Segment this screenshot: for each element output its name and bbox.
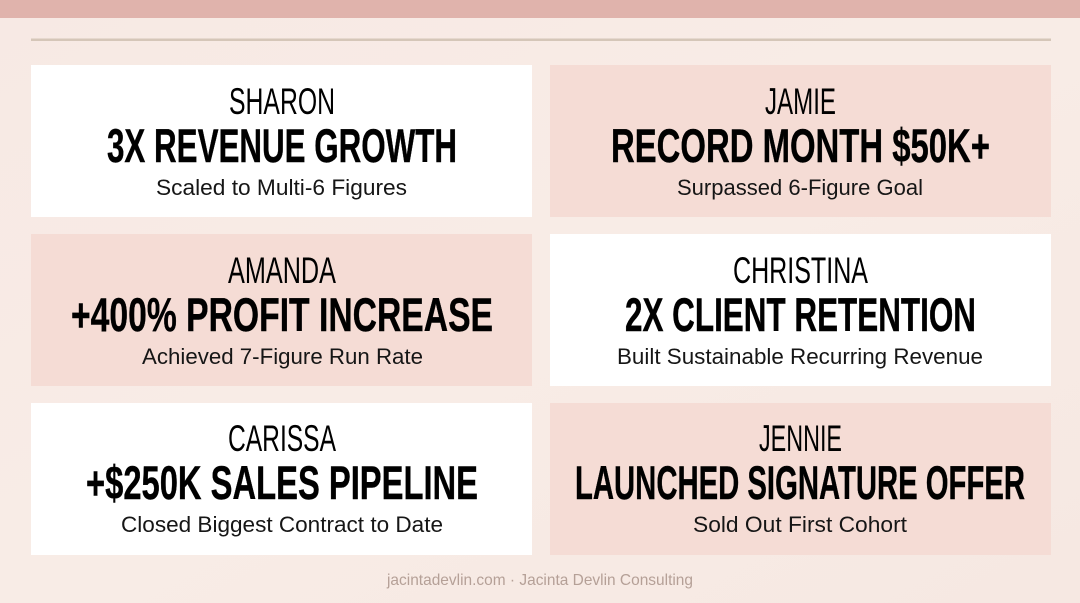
supporting text: Scaled to Multi-6 Figures: [156, 175, 407, 200]
panel: Jamie: [550, 65, 1051, 217]
footer credit: jacintadevlin.com · Jacinta Devlin Consulting: [386, 572, 693, 589]
supporting text: Closed Biggest Contract to Date: [121, 512, 443, 537]
supporting text: Achieved 7-Figure Run Rate: [142, 344, 423, 369]
headline result: +400% PROFIT INCREASE: [71, 288, 493, 341]
client name: AMANDA: [228, 250, 336, 291]
supporting text: Sold Out First Cohort: [693, 512, 908, 537]
client name: SHARON: [229, 81, 335, 122]
panel: Jennie: [550, 403, 1051, 555]
client name: JENNIE: [759, 418, 842, 459]
headline result: 3X REVENUE GROWTH: [107, 119, 457, 172]
headline result: +$250K SALES PIPELINE: [86, 456, 478, 509]
panel: Amanda: [31, 234, 532, 386]
client name: JAMIE: [765, 81, 836, 122]
panel: Carissa: [31, 403, 532, 555]
panel: Sharon: [31, 65, 532, 217]
client name: CARISSA: [228, 418, 336, 459]
top accent bar: [0, 0, 1080, 18]
client name: CHRISTINA: [733, 250, 868, 291]
supporting text: Built Sustainable Recurring Revenue: [617, 344, 983, 369]
supporting text: Surpassed 6-Figure Goal: [677, 175, 923, 200]
panel: Christina: [550, 234, 1051, 386]
header rule: [31, 38, 1051, 41]
